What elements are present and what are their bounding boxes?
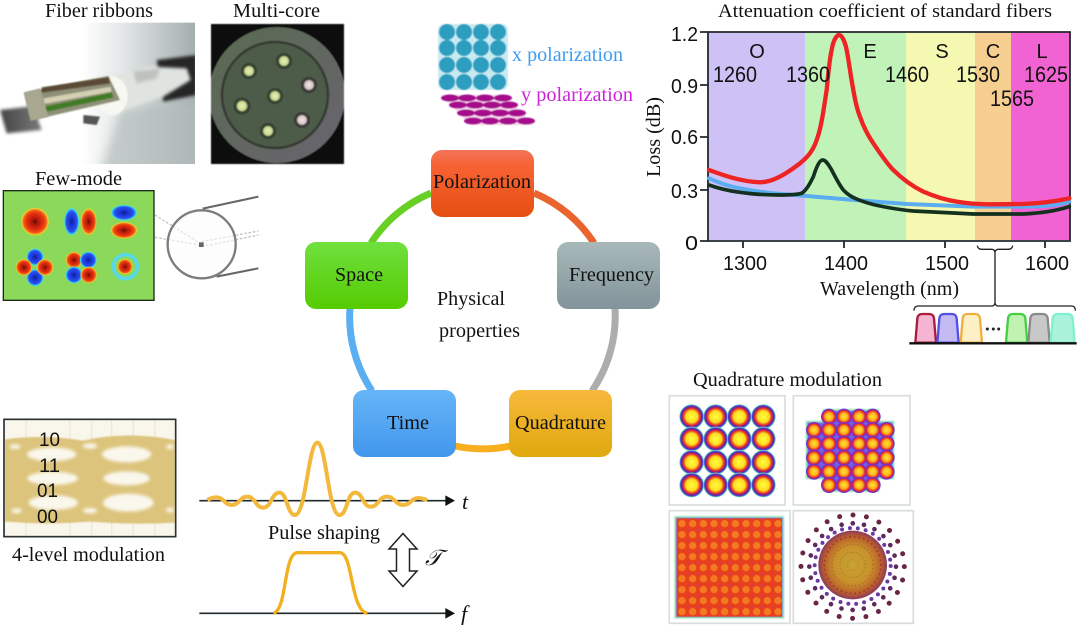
heading: Quadrature modulation: Quadrature modulation bbox=[693, 369, 882, 391]
band letters: C bbox=[986, 41, 1000, 63]
node: Frequency: Frequency bbox=[569, 264, 654, 286]
chart: pulse in time domain bbox=[199, 443, 455, 515]
node: Space: Space bbox=[335, 264, 383, 286]
node: Space bbox=[305, 242, 408, 309]
chart: pulse in frequency domain bbox=[199, 553, 455, 619]
band edge wavelengths bbox=[713, 62, 1068, 111]
node: Time: Time bbox=[387, 412, 429, 434]
band letters: E bbox=[863, 41, 877, 63]
arc: time to space bbox=[350, 308, 372, 391]
x axis tick labels: 1600 bbox=[1025, 253, 1069, 275]
heading: Attenuation coefficient: Attenuation coefficient of standard fibers bbox=[718, 1, 1052, 22]
heading: Few-mode: Few-mode bbox=[35, 168, 122, 190]
y axis tick labels: 0.3 bbox=[671, 181, 698, 203]
fiber cores bbox=[233, 52, 318, 140]
band letters: S bbox=[935, 41, 949, 63]
eye levels: 01 bbox=[37, 481, 58, 502]
axes bbox=[700, 32, 1070, 248]
wavelength bands bbox=[708, 32, 1070, 240]
heading: Multi-core: Multi-core bbox=[233, 0, 320, 22]
center label: Physical properties: Physical bbox=[437, 288, 505, 310]
eye levels: 10 bbox=[39, 430, 60, 451]
bracket: C band to WDM channels bbox=[914, 246, 1075, 311]
center label: Physical properties bbox=[437, 288, 520, 342]
center label: Physical properties: properties bbox=[439, 320, 520, 342]
band edge wavelengths: 1530 bbox=[956, 62, 1000, 87]
node: Quadrature: Quadrature bbox=[515, 412, 606, 434]
x axis tick labels: 1500 bbox=[925, 253, 969, 275]
y axis tick labels: 0 bbox=[685, 233, 698, 255]
heading: 4-level modulation: 4-level modulation bbox=[12, 544, 165, 566]
arc: frequency to quadrature bbox=[592, 308, 615, 391]
band edge wavelengths: 1360 bbox=[786, 62, 830, 87]
cycle diagram: physical properties bbox=[305, 150, 660, 457]
arc: quadrature to time bbox=[455, 446, 510, 449]
y axis tick labels: 0.9 bbox=[671, 76, 698, 98]
photo: multi-core fiber cross-section bbox=[209, 24, 345, 164]
loss curves bbox=[709, 35, 1069, 214]
node: Frequency bbox=[557, 242, 660, 309]
constellation: y polarization bbox=[441, 94, 535, 125]
arc: space to polarization bbox=[371, 193, 431, 243]
label: y polarization: y polarization bbox=[521, 84, 633, 106]
band edge wavelengths: 1260 bbox=[713, 62, 757, 87]
node: Time bbox=[353, 390, 456, 457]
constellation: circular shaped bbox=[793, 511, 913, 623]
band edge wavelengths: 1565 bbox=[990, 86, 1034, 111]
x axis tick labels: 1300 bbox=[723, 253, 767, 275]
arc: polarization to frequency bbox=[534, 193, 594, 243]
panel: few-mode field patterns bbox=[3, 191, 154, 300]
label: x polarization: x polarization bbox=[512, 44, 623, 66]
panel: 4-level eye diagram bbox=[4, 419, 176, 537]
curve: blue bbox=[709, 178, 1069, 207]
x axis tick labels bbox=[723, 253, 1069, 275]
band letters bbox=[749, 41, 1048, 63]
eye levels: 00 bbox=[37, 507, 58, 528]
node: Polarization: Polarization bbox=[433, 171, 531, 193]
eye levels: 11 bbox=[39, 456, 60, 477]
band letters: L bbox=[1036, 41, 1048, 63]
label: t: t bbox=[462, 489, 469, 514]
y axis tick labels: 1.2 bbox=[671, 24, 698, 46]
chart: attenuation versus wavelength bbox=[643, 24, 1070, 300]
x axis tick labels: 1400 bbox=[824, 253, 868, 275]
curve: dark green bbox=[709, 160, 1069, 214]
constellation: 32-QAM bbox=[793, 396, 910, 505]
band letters: O bbox=[749, 41, 765, 63]
curve: red bbox=[709, 35, 1069, 204]
photo: fiber ribbons cable bbox=[0, 23, 207, 173]
y axis title: Loss (dB) bbox=[643, 97, 665, 177]
heading: Fiber ribbons: Fiber ribbons bbox=[45, 0, 153, 22]
constellation: x polarization bbox=[438, 24, 508, 90]
y axis tick labels: 0.6 bbox=[671, 127, 698, 149]
y axis tick labels bbox=[671, 24, 698, 255]
constellation: 16-QAM bbox=[669, 396, 785, 505]
band edge wavelengths: 1460 bbox=[885, 62, 929, 87]
label: Fourier transform symbol: 𝒯 bbox=[425, 546, 449, 571]
eye levels bbox=[37, 430, 60, 528]
WDM channel filters bbox=[909, 314, 1077, 343]
panel: quadrature constellations bbox=[669, 396, 913, 623]
heading: Pulse shaping: Pulse shaping bbox=[268, 522, 380, 544]
band edge wavelengths: 1625 bbox=[1024, 62, 1068, 87]
node: Quadrature bbox=[509, 390, 612, 457]
icon: Fourier double arrow bbox=[389, 534, 417, 586]
node: Polarization bbox=[431, 150, 534, 217]
constellation: dense square QAM bbox=[669, 511, 790, 623]
diagram: fiber end with core bbox=[155, 197, 258, 278]
x axis title: Wavelength (nm) bbox=[820, 278, 959, 300]
